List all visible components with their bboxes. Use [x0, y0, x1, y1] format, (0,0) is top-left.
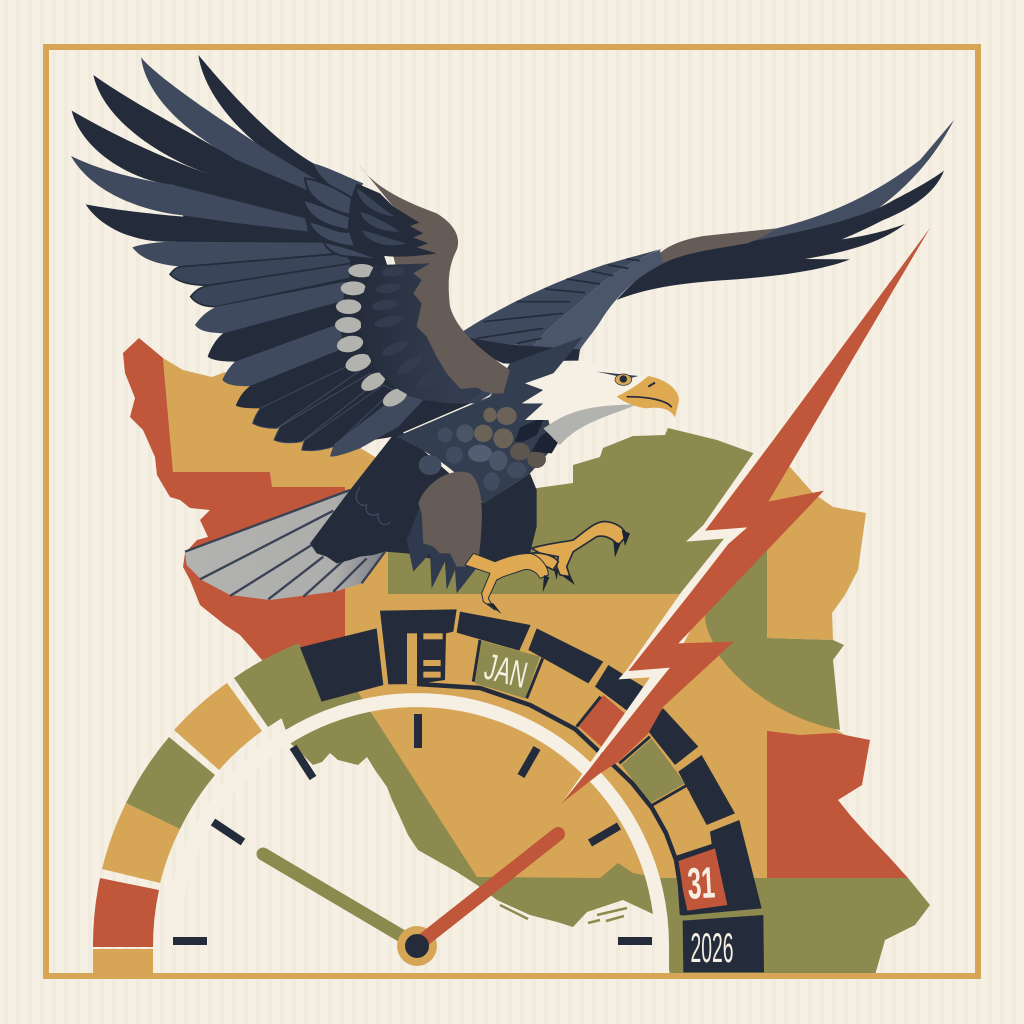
thigh brown	[418, 472, 482, 567]
upper covert group	[349, 183, 437, 257]
label: JAN: JAN	[481, 646, 531, 696]
red cell	[579, 695, 648, 762]
day surround	[673, 820, 762, 916]
slate base feathers	[460, 248, 663, 347]
eagle: tail	[185, 490, 385, 600]
chest	[397, 337, 583, 503]
month cell	[475, 641, 540, 698]
gauge: hub	[405, 934, 429, 958]
primary feathers	[71, 55, 423, 457]
throat grey	[543, 404, 637, 445]
year cell	[683, 915, 764, 972]
gauge: calendar wheel	[300, 609, 764, 972]
eagle: right wing	[460, 120, 954, 364]
gauge: hub ring	[397, 926, 437, 966]
eye	[615, 374, 632, 385]
mark strips	[407, 633, 443, 684]
calendar block	[300, 628, 383, 702]
eagle	[71, 55, 954, 614]
small upper coverts	[303, 163, 380, 260]
beak mouth line	[627, 397, 672, 407]
near foot	[465, 553, 558, 610]
calendar cell	[446, 635, 477, 680]
brown shoulder	[359, 165, 510, 393]
bolt: red body	[562, 228, 930, 803]
body feather lines	[356, 487, 390, 525]
gauge: red hand	[417, 834, 558, 945]
map region: western red	[123, 338, 345, 660]
slate strip	[533, 250, 663, 350]
thigh under feathers	[407, 507, 480, 593]
map region: central yellow	[345, 480, 845, 878]
gauge: left colour segments	[93, 643, 321, 975]
gauge: cream ring	[172, 700, 662, 975]
lightning bolt	[562, 228, 930, 803]
beak	[617, 376, 679, 417]
brown leading edge	[660, 228, 777, 263]
green cell	[622, 738, 685, 803]
map: gulf islands	[500, 905, 627, 923]
label: 2026: 2026	[691, 923, 733, 971]
eagle: body and head	[310, 337, 679, 614]
map of Iran	[123, 338, 930, 975]
gauge: tick marks	[173, 714, 652, 941]
gauge: inner dark line	[417, 684, 682, 915]
map region: south-west green	[262, 640, 477, 885]
gauge: green hand	[263, 854, 417, 945]
calendar cell	[528, 661, 597, 725]
calendar cell	[652, 790, 712, 855]
map region: south-east red	[767, 731, 908, 878]
nostril	[648, 383, 655, 387]
calendar block with marks	[380, 609, 457, 684]
slate leading feather	[750, 120, 954, 242]
calendar block	[643, 708, 698, 765]
chest scales	[419, 407, 546, 491]
calendar block	[528, 628, 603, 683]
map region: northern green	[388, 428, 844, 730]
calendar block	[457, 612, 531, 651]
head white	[522, 361, 648, 444]
eye brow	[597, 372, 638, 379]
bolt: cream edge	[562, 228, 930, 803]
calendar block	[595, 665, 643, 712]
grey wing spots	[335, 264, 410, 410]
throat dark feathers	[515, 417, 562, 453]
dark mass under wing	[175, 152, 490, 447]
eagle: left wing	[71, 55, 510, 457]
day cell	[677, 848, 727, 911]
dark lower covert	[463, 337, 580, 364]
map region: southern green	[477, 863, 930, 975]
dark flight feathers	[617, 171, 944, 300]
lower covert group	[361, 263, 492, 403]
gauge	[93, 609, 764, 975]
lower covert feather marks	[371, 265, 483, 405]
base feather lines	[477, 259, 640, 343]
label: 31: 31	[686, 858, 716, 909]
talons	[487, 530, 630, 614]
far foot	[532, 521, 626, 577]
map region: eastern yellow	[767, 460, 866, 640]
pupil	[620, 375, 627, 383]
calendar block	[678, 755, 735, 825]
upper covert bars	[357, 188, 407, 245]
map region: north-west yellow	[163, 358, 410, 492]
body	[310, 428, 537, 567]
cell divider lines	[473, 640, 687, 806]
